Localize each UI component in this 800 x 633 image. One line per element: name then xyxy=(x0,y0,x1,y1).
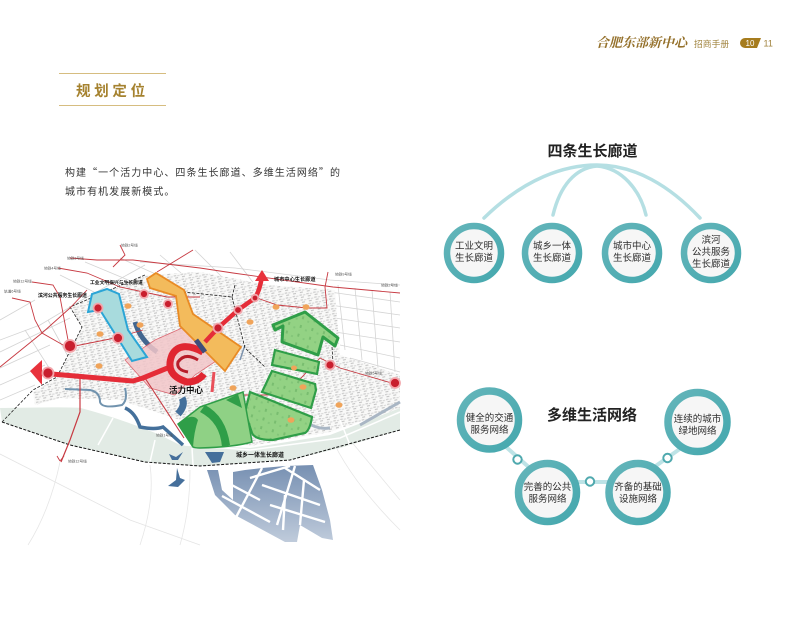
metro lines xyxy=(0,245,400,462)
section heading: 规划定位 xyxy=(76,82,149,100)
blue corridor xyxy=(88,289,147,361)
node: infrastructure: 设施网络 xyxy=(619,493,657,505)
node: transport: 健全的交通 xyxy=(466,412,514,424)
node: public services: 完善的公共 xyxy=(524,481,572,493)
southern lakes xyxy=(168,452,224,487)
header: brochure title: 招商手册 xyxy=(694,38,729,49)
green arrow block xyxy=(273,312,338,355)
metro line labels: 地铁12号线 xyxy=(13,278,32,284)
page number: 10 xyxy=(746,39,755,48)
green buffer band xyxy=(0,407,400,466)
corridor labels xyxy=(38,275,316,459)
metro line labels: 地铁2号线 xyxy=(121,242,138,248)
corridor nodes xyxy=(42,290,400,388)
red west corridor xyxy=(40,367,170,381)
metro line labels xyxy=(4,242,398,464)
node: infrastructure: 齐备的基础 xyxy=(614,481,662,493)
corridor labels: 城乡一体生长廊道 xyxy=(236,451,284,459)
node: transport: 服务网络 xyxy=(470,424,509,436)
outer road network xyxy=(0,250,400,545)
dark green forest xyxy=(178,394,242,447)
intro text xyxy=(65,164,341,198)
connector rings xyxy=(513,454,672,486)
corridor labels: 城市中心生长廊道 xyxy=(274,275,316,283)
node: industrial corridor xyxy=(447,226,501,280)
node: public services: 服务网络 xyxy=(528,493,567,505)
node: industrial corridor: 工业文明 xyxy=(455,240,493,252)
core district xyxy=(125,320,225,395)
metro line labels: 地铁2号线 xyxy=(381,282,398,288)
heading: 四条生长廊道 xyxy=(547,142,638,160)
node: urban-rural corridor: 生长廊道 xyxy=(533,252,571,264)
node: transport xyxy=(460,391,518,449)
page number xyxy=(740,38,773,48)
rural canal district xyxy=(207,465,333,542)
north east boundary xyxy=(183,285,333,367)
urban fabric xyxy=(33,272,400,446)
node: greenery: 绿地网络 xyxy=(678,425,717,437)
red south corridor xyxy=(212,372,214,392)
label: vitality centre: 活力中心 xyxy=(169,385,204,395)
orange corridor xyxy=(147,273,241,371)
node: riverside corridor: 生长廊道 xyxy=(692,258,730,270)
node: urban-rural corridor: 城乡一体 xyxy=(533,240,571,252)
west boundary xyxy=(2,275,145,422)
white roads across band xyxy=(0,405,400,465)
metro line labels: 地铁5号线 xyxy=(365,370,382,376)
panel: multi-dimensional living network xyxy=(460,391,727,522)
metro line labels: 地铁4号线 xyxy=(44,266,61,270)
page number: 11 xyxy=(764,38,773,48)
node: greenery xyxy=(668,392,727,452)
orange activity nodes xyxy=(96,303,342,423)
metro line labels: 地铁12号线 xyxy=(68,458,87,464)
corridor arrowheads xyxy=(30,270,269,385)
green block 2 xyxy=(272,350,319,374)
vitality centre emblem xyxy=(170,340,205,382)
node: public services xyxy=(518,464,576,522)
node: riverside corridor: 滨河 xyxy=(701,234,721,246)
green corridor xyxy=(178,312,338,448)
node: urban-rural corridor xyxy=(525,226,579,280)
panel: four growth corridors xyxy=(447,142,738,280)
node: city centre corridor: 城市中心 xyxy=(613,240,651,252)
red city corridor xyxy=(205,276,262,342)
metro line labels: 地铁9号线 xyxy=(335,272,352,276)
corridor labels: 滨河公共服务生长廊道 xyxy=(38,292,87,299)
metro line labels: 地铁1号线 xyxy=(156,432,173,438)
node: riverside corridor: 公共服务 xyxy=(692,246,730,258)
river and water bodies xyxy=(65,322,400,445)
node: greenery: 连续的城市 xyxy=(674,413,722,425)
metro line labels: 轨道6号线 xyxy=(4,288,21,294)
header: brochure title: 合肥东部新中心 xyxy=(596,35,690,50)
metro line labels: 地铁3号线 xyxy=(67,256,84,260)
node: infrastructure xyxy=(609,464,667,522)
green block 5 xyxy=(178,392,252,448)
connecting arcs xyxy=(484,165,700,218)
intro text: 构建“一个活力中心、四条生长廊道、多维生活网络”的 xyxy=(65,164,341,179)
node: industrial corridor: 生长廊道 xyxy=(455,252,493,264)
section heading xyxy=(59,74,166,106)
corridor labels: 工业文明振兴与生长廊道 xyxy=(90,279,143,286)
green block 3 xyxy=(262,371,316,408)
header: brochure title xyxy=(596,35,729,50)
node: city centre corridor xyxy=(605,226,659,280)
master plan map xyxy=(0,242,400,545)
node: riverside corridor xyxy=(684,226,738,280)
green block 4 xyxy=(245,392,312,440)
heading: 多维生活网络 xyxy=(547,406,637,424)
zone boundary xyxy=(2,422,400,466)
node: city centre corridor: 生长廊道 xyxy=(613,252,651,264)
connectors xyxy=(505,446,684,482)
intro text: 城市有机发展新模式。 xyxy=(65,183,175,198)
